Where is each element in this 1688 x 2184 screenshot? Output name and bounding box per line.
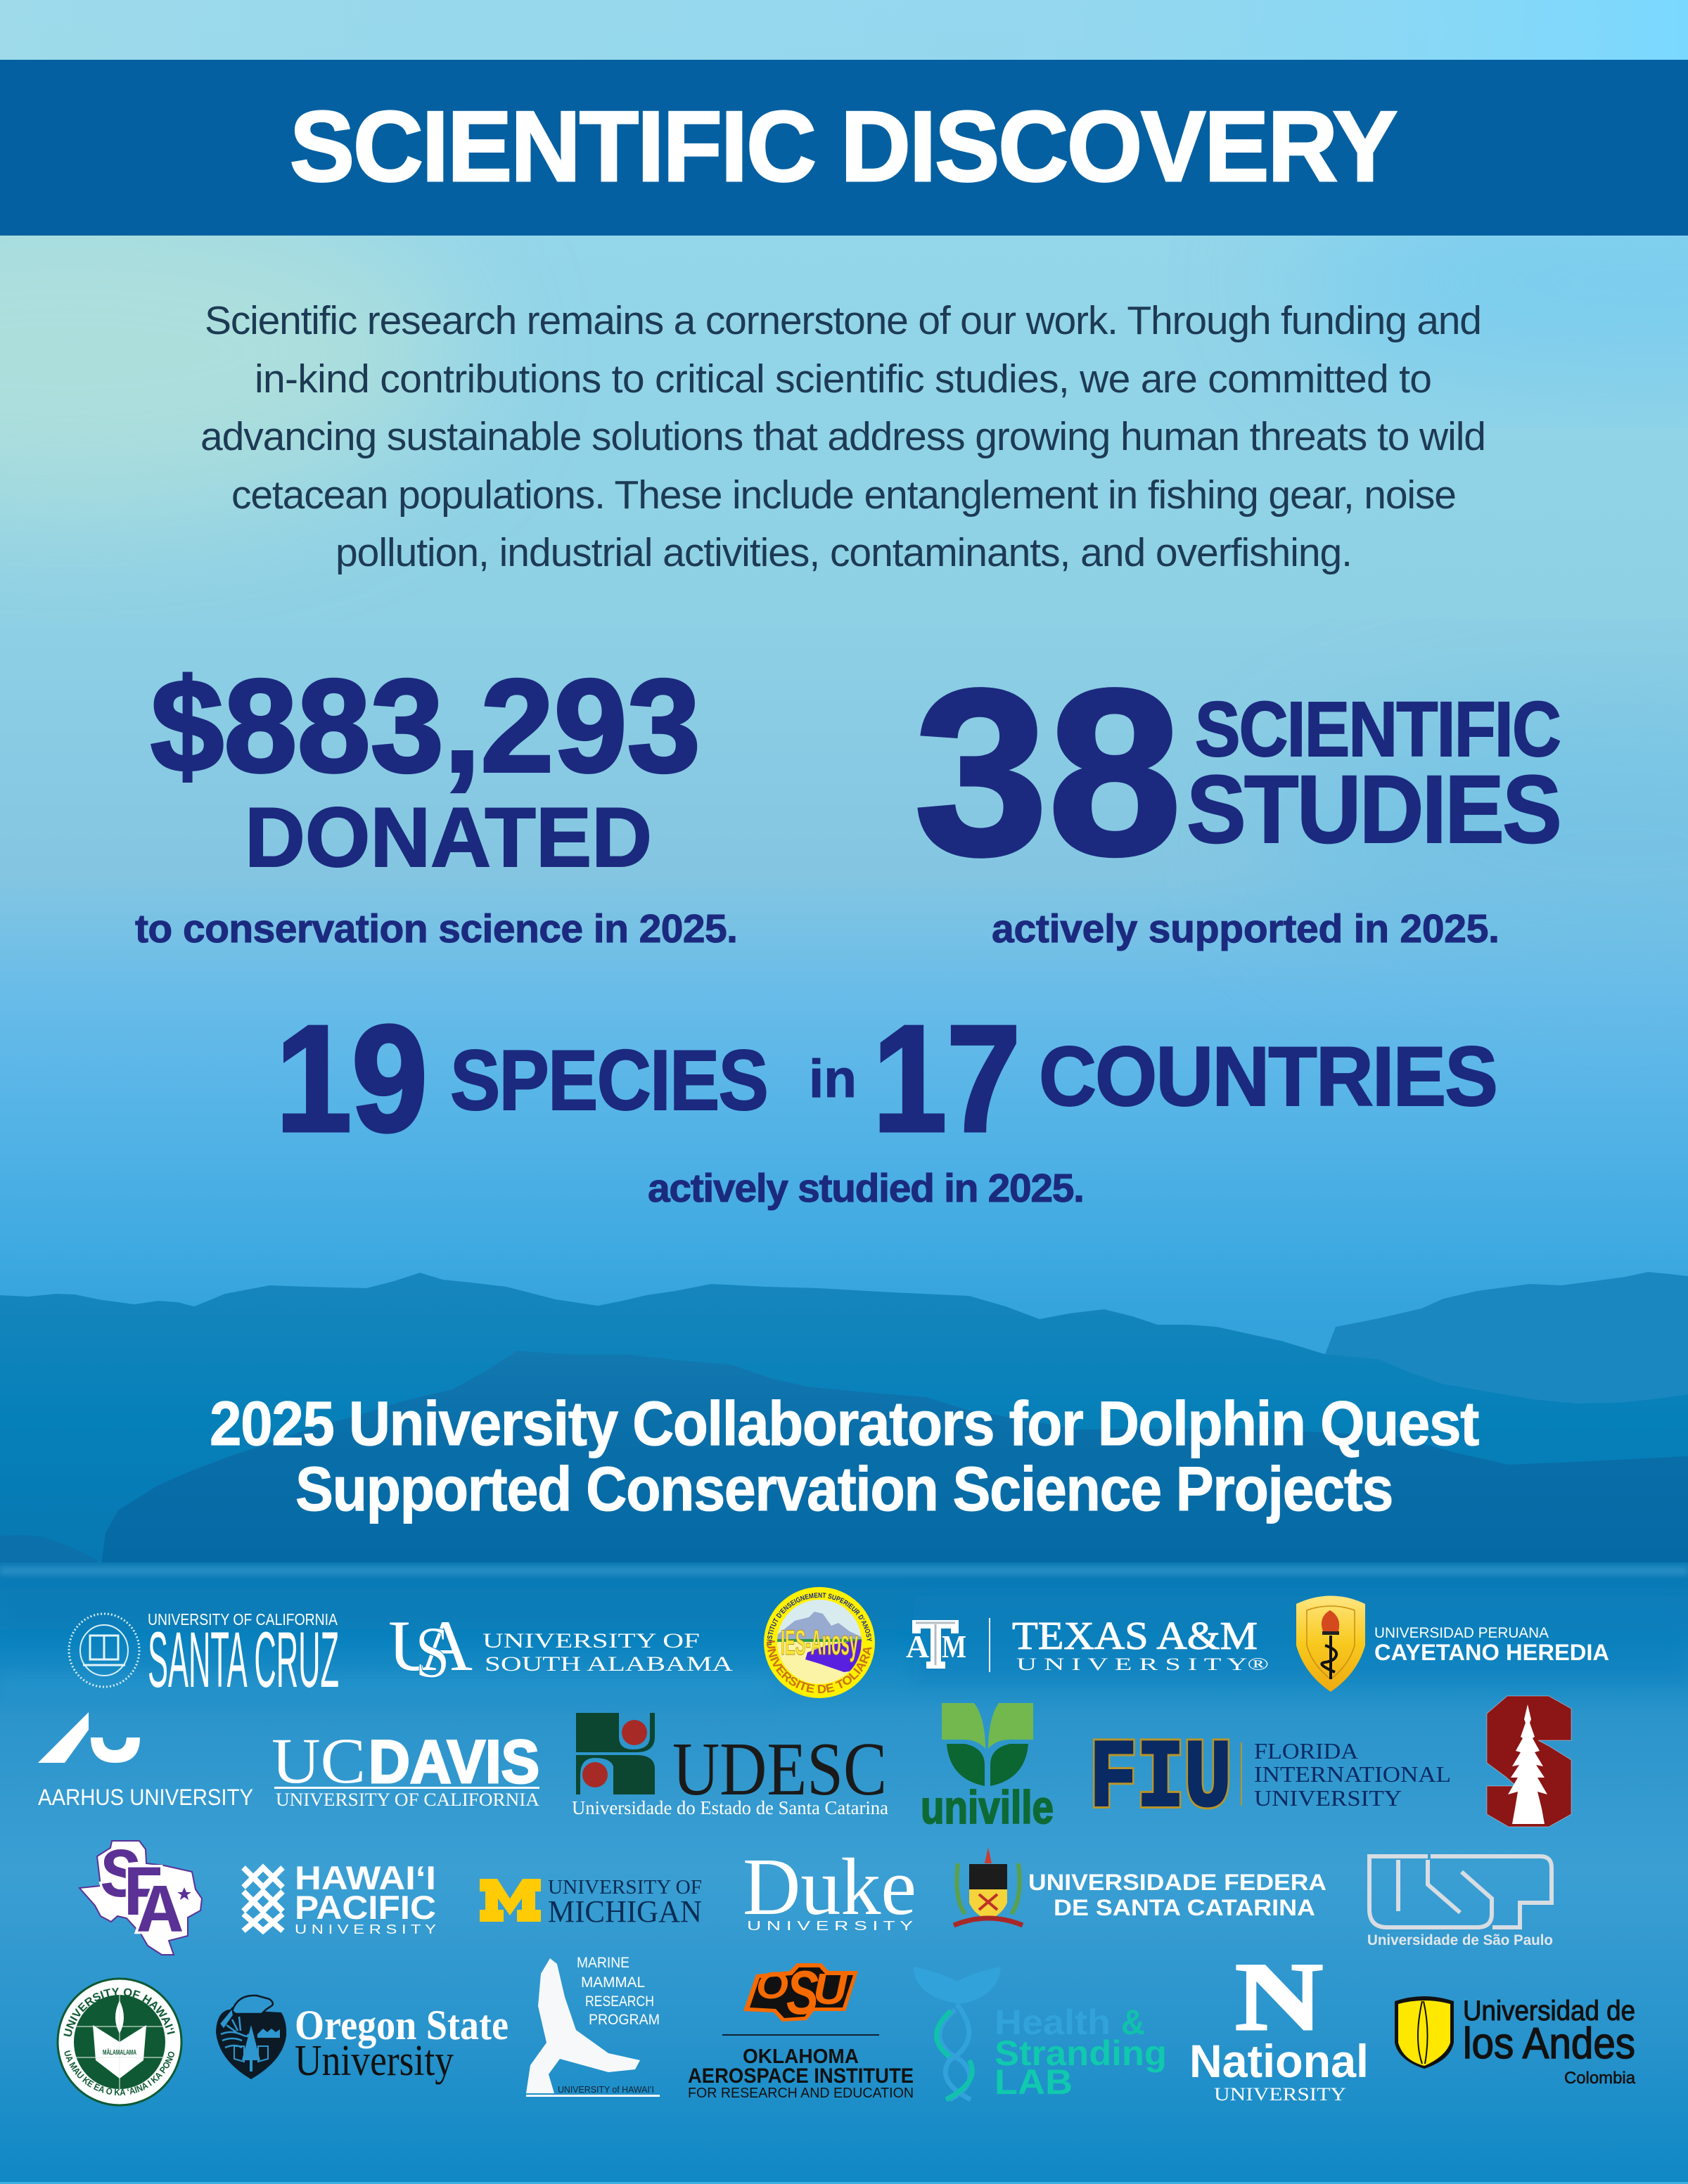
- logo: IES Anosy: UNIVERSITE DE TOLIARA: [767, 1640, 872, 1693]
- logo: University of Hawaii seal: [56, 1977, 183, 2107]
- intro paragraph: [200, 298, 1486, 575]
- logo: UC Davis: DAVIS: [369, 1728, 539, 1796]
- logo: University of South Alabama: S: [415, 1611, 450, 1693]
- logo: UC Santa Cruz: [69, 1610, 339, 1704]
- logo: Universidad Peruana Cayetano Heredia: [1296, 1596, 1609, 1692]
- logo: Stephen F. Austin: A: [138, 1875, 182, 1953]
- collaborators heading: 2025 University Collaborators for Dolphin Quest: [210, 1388, 1479, 1458]
- collaborators heading: [210, 1388, 1479, 1524]
- logo: Marine Mammal Research Program: PROGRAM: [589, 2012, 660, 2028]
- logo: Health and Stranding Lab: [914, 1967, 1167, 2102]
- logo: Oregon State University: [216, 1996, 509, 2085]
- logo: National University: UNIVERSITY: [1214, 2084, 1346, 2105]
- intro paragraph: in-kind contributions to critical scientific studies, we are committed to: [255, 356, 1432, 402]
- text: SANTA CRUZ: [148, 1616, 339, 1704]
- intro paragraph: advancing sustainable solutions that address growing human threats to wild: [200, 414, 1486, 459]
- logo: University of South Alabama: SOUTH ALABAMA: [485, 1652, 733, 1676]
- logo: IES Anosy: INSTITUT D'ENSEIGNEMENT SUPERIEUR D'ANOSY: [767, 1593, 872, 1645]
- logo: Florida International University: FIU: [1089, 1726, 1232, 1834]
- stat: scientific studies: 38: [914, 641, 1182, 904]
- logo: Texas A&M: A: [906, 1629, 929, 1664]
- logo: University of South Alabama: UNIVERSITY OF: [482, 1629, 700, 1652]
- logo: Universidad de los Andes: Colombia: [1564, 2069, 1636, 2088]
- logo: IES Anosy: IES-Anosy: [781, 1623, 858, 1662]
- logo: Health and Stranding Lab: LAB: [995, 2062, 1073, 2102]
- logo: Universidad de los Andes: Universidad de: [1463, 1996, 1635, 2026]
- logo: Universidade de Sao Paulo: Universidade de São Paulo: [1367, 1932, 1553, 1948]
- logo: UDESC: Universidade do Estado de Santa Catarina: [572, 1797, 888, 1818]
- logo: Oregon State University: University: [295, 2037, 454, 2085]
- stat: dollars donated: DONATED: [245, 790, 652, 885]
- logo: Oklahoma Aerospace Institute: U: [813, 1965, 848, 2014]
- stat: species and countries: actively studied in 2025.: [648, 1166, 1085, 1211]
- background: distant mountain ridges: [0, 1272, 1688, 1562]
- logo: Hawaii Pacific University: HAWAIʻI: [295, 1859, 436, 1896]
- stat: species and countries: in: [809, 1049, 857, 1109]
- logo: Florida International University: FIU: [1089, 1726, 1232, 1834]
- logo: Florida International University: FLORIDA: [1254, 1738, 1358, 1764]
- logo: UC Santa Cruz: UNIVERSITY OF CALIFORNIA: [148, 1610, 338, 1629]
- logo: National University: [1189, 1943, 1369, 2105]
- logo: Oklahoma Aerospace Institute: O: [756, 1965, 788, 2007]
- logo: Aarhus University: [38, 1712, 253, 1810]
- logo: Oregon State University: 1868: [257, 2038, 279, 2045]
- logo: University of South Alabama: A: [419, 1606, 473, 1686]
- logo: Oklahoma Aerospace Institute: [688, 1958, 914, 2101]
- logo: UC Davis: [271, 1725, 539, 1810]
- logo: Universidade Federal de Santa Catarina: UNIVERSIDADE FEDERA: [1028, 1870, 1326, 1895]
- title: SCIENTIFIC DISCOVERY: [290, 91, 1396, 203]
- intro paragraph: cetacean populations. These include entanglement in fishing gear, noise: [231, 473, 1457, 518]
- logo: Oklahoma Aerospace Institute: S: [786, 1958, 819, 2027]
- stat: scientific studies: SCIENTIFIC: [1195, 686, 1560, 773]
- logo: UDESC: UDESC: [672, 1728, 887, 1811]
- logo: Texas A&M: U N I V E R S I T Y®: [1016, 1655, 1269, 1674]
- title banner: [0, 60, 1688, 236]
- stat: dollars donated: to conservation science in 2025.: [135, 906, 738, 951]
- intro paragraph: Scientific research remains a cornerstone of our work. Through funding and: [205, 298, 1482, 343]
- collaborators heading: Supported Conservation Science Projects: [295, 1453, 1393, 1524]
- logo: Texas A&M: M: [942, 1629, 966, 1664]
- logo: Universidad de los Andes: [1395, 1996, 1636, 2088]
- logo: Marine Mammal Research Program: MAMMAL: [581, 1974, 645, 1991]
- logo: University of Hawaii seal: UA MAU KE EA O KA ʻĀINA I KA PONO: [65, 2050, 174, 2095]
- logo: Florida International University: [1089, 1726, 1451, 1834]
- logo: Health and Stranding Lab: Health: [995, 2003, 1111, 2042]
- stat: species and countries: SPECIES: [450, 1032, 767, 1128]
- logo: Hawaii Pacific University: [243, 1859, 436, 1936]
- logo: National University: National: [1189, 2035, 1369, 2087]
- stat: species and countries: [276, 994, 1497, 1211]
- logo: University of Hawaii seal: UNIVERSITY OF HAWAIʻI: [63, 1987, 175, 2036]
- logo: Health and Stranding Lab: Stranding: [995, 2034, 1167, 2073]
- logo: Stanford: [1487, 1696, 1571, 1827]
- logo: Oklahoma Aerospace Institute: AEROSPACE INSTITUTE: [688, 2064, 914, 2088]
- logo: Stephen F. Austin: F: [122, 1855, 165, 1936]
- stat: scientific studies: STUDIES: [1187, 756, 1560, 863]
- stat: dollars donated: $883,293: [151, 652, 701, 799]
- logo: Stephen F. Austin: [79, 1839, 202, 1955]
- logo: Duke: U N I V E R S I T Y: [747, 1919, 913, 1933]
- logo: Universidade Federal de Santa Catarina: DE SANTA CATARINA: [1054, 1895, 1315, 1920]
- logo: UDESC: [572, 1713, 888, 1818]
- logo: University of Michigan: MICHIGAN: [548, 1894, 702, 1929]
- logo: Marine Mammal Research Program: [526, 1955, 660, 2097]
- logo: Univille: univille: [921, 1781, 1054, 1833]
- logo: Universidad Peruana Cayetano Heredia: CAYETANO HEREDIA: [1374, 1640, 1609, 1665]
- logo: University of Hawaii seal: MĀLAMALAMA: [103, 2048, 136, 2057]
- logo: Florida International University: UNIVERSITY: [1254, 1785, 1402, 1811]
- logo: Universidad de los Andes: los Andes: [1463, 2019, 1635, 2068]
- logo: UC Davis: UC: [271, 1725, 366, 1797]
- intro paragraph: pollution, industrial activities, contaminants, and overfishing.: [335, 530, 1353, 575]
- logo: University of Michigan: UNIVERSITY OF: [548, 1877, 702, 1899]
- stat: dollars donated: [135, 652, 738, 951]
- logo: Oklahoma Aerospace Institute: FOR RESEARCH AND EDUCATION: [688, 2086, 914, 2101]
- logo: University of South Alabama: U: [388, 1606, 440, 1686]
- logo: Marine Mammal Research Program: RESEARCH: [585, 1993, 654, 2010]
- logo: Universidade Federal de Santa Catarina: [954, 1847, 1326, 1925]
- logo: Universidade de Sao Paulo: [1367, 1856, 1553, 1948]
- logo: Hawaii Pacific University: U N I V E R S I T Y: [295, 1922, 436, 1936]
- logo: Univille: [921, 1703, 1054, 1833]
- logo: Aarhus University: AARHUS UNIVERSITY: [38, 1785, 253, 1810]
- logo: Oregon State University: Oregon State: [295, 2002, 509, 2048]
- stat: species and countries: 19: [276, 994, 428, 1163]
- logo: Marine Mammal Research Program: MARINE: [577, 1955, 629, 1971]
- logo: University of South Alabama: [390, 1622, 733, 1678]
- logo: National University: N: [1235, 1943, 1323, 2050]
- logo: Oklahoma Aerospace Institute: OKLAHOMA: [743, 2045, 859, 2068]
- logo: Florida International University: INTERNATIONAL: [1254, 1761, 1451, 1787]
- logo: UC Davis: UNIVERSITY OF CALIFORNIA: [276, 1790, 539, 1810]
- logo: Stephen F. Austin: S: [101, 1839, 141, 1918]
- logo: Hawaii Pacific University: PACIFIC: [295, 1889, 436, 1926]
- stat: species and countries: 17: [873, 994, 1021, 1163]
- stat: scientific studies: [914, 641, 1560, 951]
- background: water surface: [0, 1567, 1688, 2184]
- logo: Health and Stranding Lab: &: [1121, 2003, 1145, 2042]
- logo: University of Michigan: [480, 1877, 702, 1929]
- logo: Duke: Duke: [743, 1842, 916, 1932]
- logo: Texas A&M: TEXAS A&M: [1012, 1614, 1258, 1658]
- logo: Universidad Peruana Cayetano Heredia: UNIVERSIDAD PERUANA: [1374, 1625, 1549, 1641]
- stat: scientific studies: actively supported in 2025.: [992, 906, 1500, 951]
- stat: species and countries: COUNTRIES: [1039, 1029, 1497, 1124]
- logo: Texas A&M: [906, 1614, 1269, 1674]
- logo: Marine Mammal Research Program: UNIVERSITY of HAWAIʻI: [558, 2084, 654, 2095]
- logo: IES Anosy: [764, 1587, 875, 1698]
